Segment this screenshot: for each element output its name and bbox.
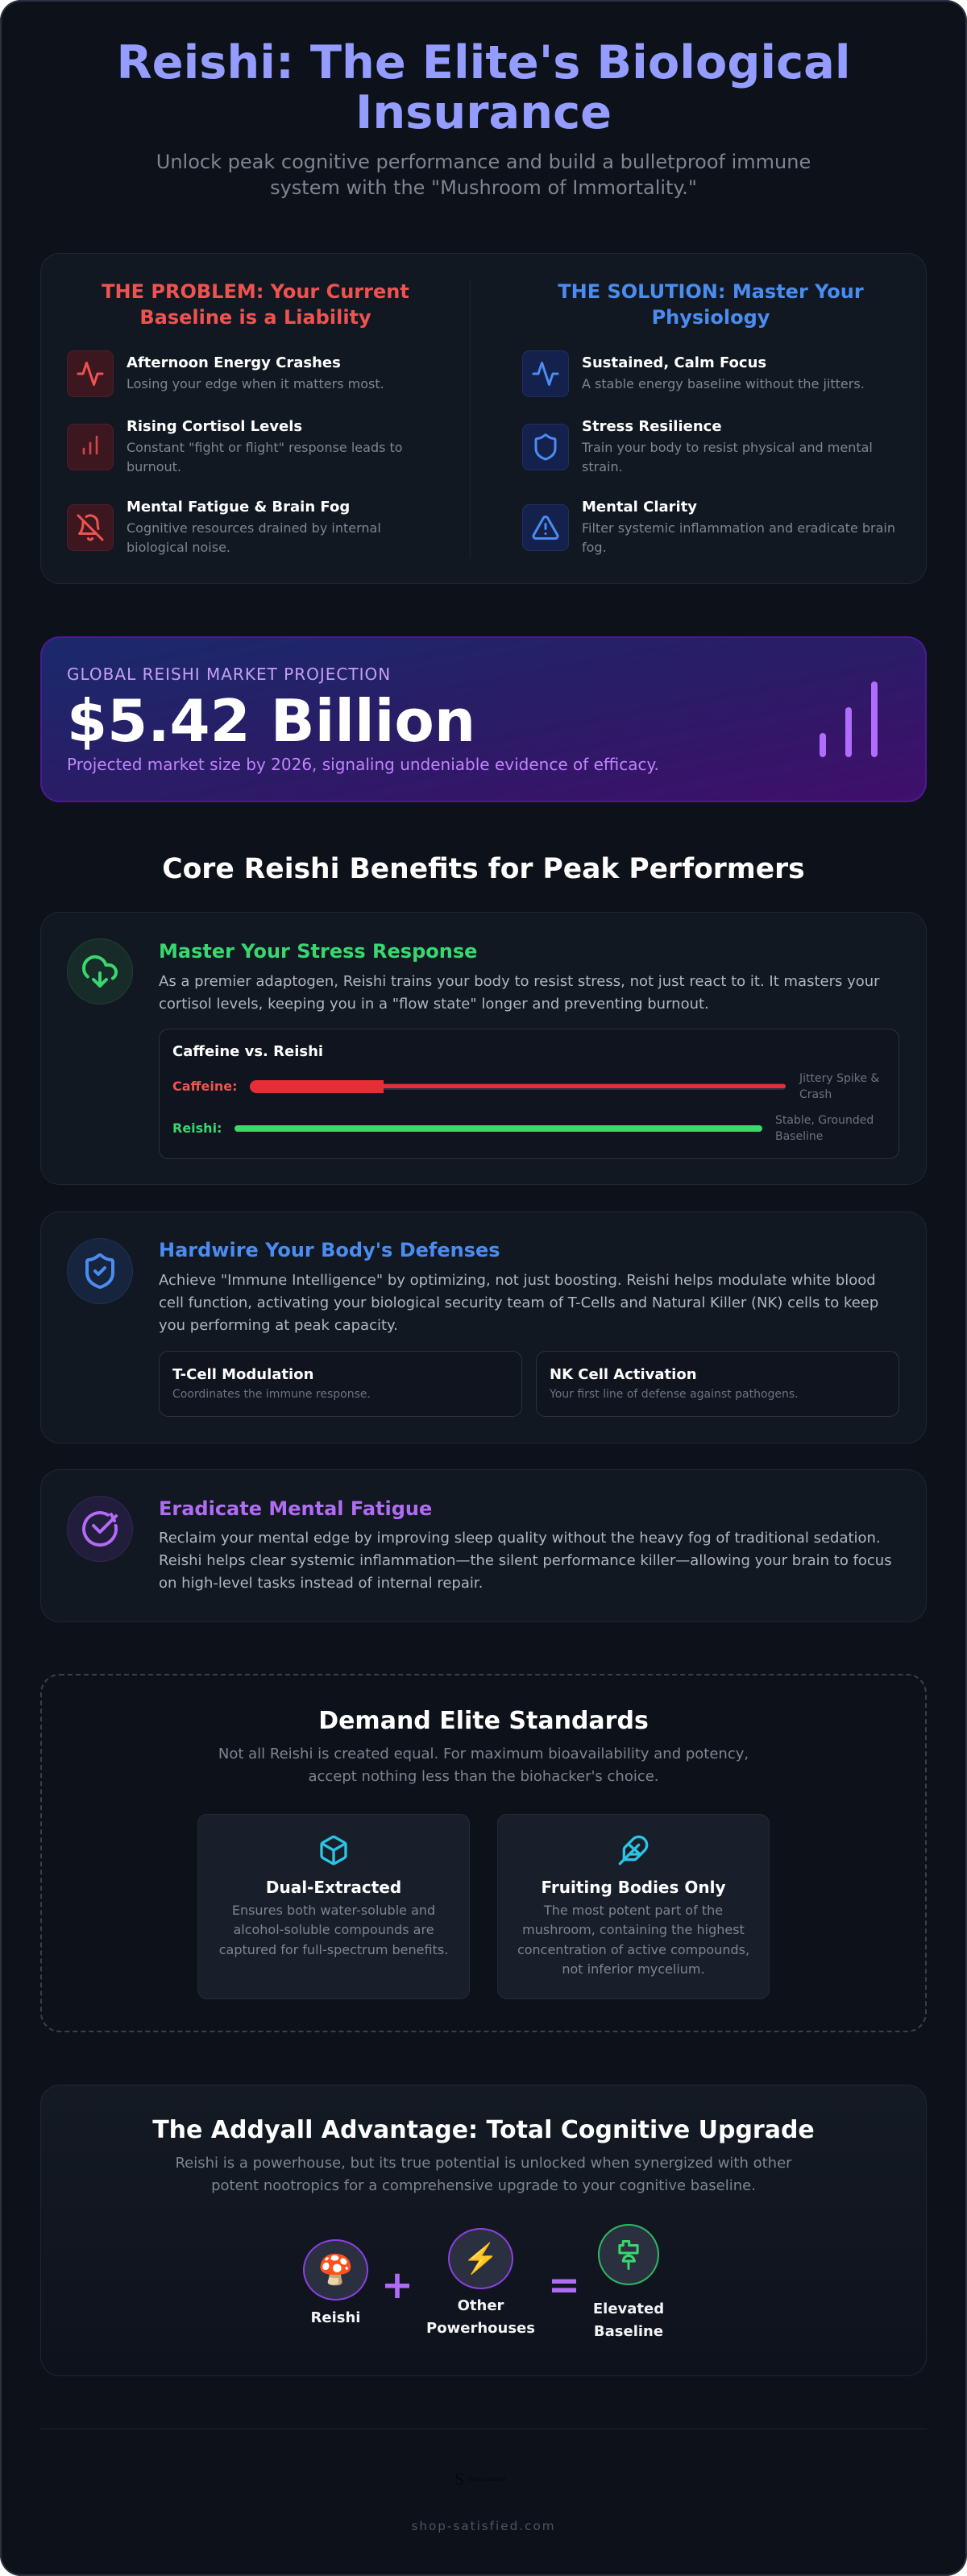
card body bbox=[159, 973, 880, 1013]
section intro bbox=[218, 1746, 749, 1785]
card body: you performing at peak capacity. bbox=[159, 1317, 398, 1334]
text: stress resilience bbox=[582, 418, 873, 474]
caffeine label: Caffeine: bbox=[172, 1079, 237, 1094]
panel: elite standards bbox=[40, 1674, 927, 2032]
icon: activity blue bbox=[522, 350, 569, 397]
icon: shield check bbox=[67, 1238, 133, 1304]
card: dual-extracted bbox=[197, 1814, 470, 1999]
card body: on high-level tasks instead of internal repair. bbox=[159, 1575, 483, 1592]
label: other powerhouses bbox=[426, 2297, 535, 2337]
text: mental fatigue: Cognitive resources drained by internal bbox=[127, 520, 381, 536]
section intro: potent nootropics for a comprehensive upgrade to your cognitive baseline. bbox=[211, 2177, 756, 2194]
label: elevated baseline: Elevated bbox=[593, 2301, 664, 2317]
section heading: Demand Elite Standards bbox=[318, 1707, 649, 1735]
stat value: $5.42 Billion bbox=[67, 687, 475, 755]
card text bbox=[517, 1903, 749, 1977]
card body: Achieve "Immune Intelligence" by optimizing, not just boosting. Reishi helps modulate white blood bbox=[159, 1272, 876, 1289]
heading: the problem bbox=[102, 280, 409, 329]
text: rising cortisol: Rising Cortisol Levels bbox=[127, 418, 302, 435]
problem item: rising cortisol bbox=[67, 418, 403, 474]
card body: Reclaim your mental edge by improving sleep quality without the heavy fog of traditional sedation. bbox=[159, 1530, 881, 1547]
card text: Ensures both water-soluble and bbox=[232, 1903, 435, 1918]
heading: the solution: Physiology bbox=[652, 306, 770, 329]
reishi note bbox=[775, 1114, 874, 1143]
reishi label: Reishi: bbox=[172, 1120, 222, 1136]
stat description: Projected market size by 2026, signaling undeniable evidence of efficacy. bbox=[67, 755, 659, 774]
card heading: Master Your Stress Response bbox=[159, 940, 477, 963]
sub card heading: NK Cell Activation bbox=[550, 1366, 697, 1383]
reishi note: Stable, Grounded bbox=[775, 1114, 874, 1127]
footer logo: Shop Satisfied bbox=[468, 2476, 505, 2483]
solution item: mental clarity bbox=[522, 499, 895, 555]
icon: feather bbox=[619, 1835, 648, 1866]
text: stress resilience: strain. bbox=[582, 459, 623, 474]
heading: the problem: THE PROBLEM: Your Current bbox=[102, 280, 409, 303]
text: afternoon energy crashes: Losing your edge when it matters most. bbox=[127, 376, 384, 391]
subtitle: Unlock peak cognitive performance and build a bulletproof immune bbox=[156, 151, 811, 173]
icon: cloud download bbox=[67, 938, 133, 1004]
card text: concentration of active compounds, bbox=[517, 1942, 749, 1957]
caffeine note: Jittery Spike & bbox=[799, 1072, 879, 1085]
heading: the problem: Baseline is a Liability bbox=[139, 306, 371, 329]
card text: alcohol-soluble compounds are bbox=[233, 1922, 434, 1937]
footer url: shop-satisfied.com bbox=[411, 2519, 556, 2533]
section intro: Reishi is a powerhouse, but its true potential is unlocked when synergized with other bbox=[175, 2155, 792, 2172]
label: elevated baseline: Baseline bbox=[594, 2323, 663, 2340]
card text: The most potent part of the bbox=[544, 1903, 723, 1918]
panel: immune defenses card bbox=[40, 1211, 927, 1443]
caffeine bar bbox=[250, 1080, 786, 1093]
label: other powerhouses: Other bbox=[458, 2297, 504, 2314]
card text: mushroom, containing the highest bbox=[522, 1922, 745, 1937]
text: mental fatigue: Mental Fatigue & Brain Fog bbox=[127, 499, 350, 516]
title: Reishi: The Elite's Biological bbox=[116, 35, 851, 89]
card text bbox=[219, 1903, 448, 1957]
chart title: Caffeine vs. Reishi bbox=[172, 1043, 323, 1060]
subtitle bbox=[156, 151, 811, 199]
card body: cortisol levels, keeping you in a "flow state" longer and preventing burnout. bbox=[159, 996, 709, 1013]
text: mental fatigue: biological noise. bbox=[127, 540, 230, 555]
icon: rising bars red bbox=[67, 424, 114, 470]
card heading: Eradicate Mental Fatigue bbox=[159, 1497, 432, 1520]
icon: shield blue bbox=[522, 424, 569, 470]
label: reishi: Reishi bbox=[311, 2309, 360, 2326]
section intro: accept nothing less than the biohacker's choice. bbox=[308, 1768, 659, 1785]
solution item: stress resilience bbox=[522, 418, 873, 474]
heading: the solution: THE SOLUTION: Master Your bbox=[558, 280, 864, 303]
stat label: GLOBAL REISHI MARKET PROJECTION bbox=[67, 665, 391, 684]
text: mental clarity bbox=[582, 499, 895, 555]
text: mental fatigue bbox=[127, 499, 381, 555]
equation: reishi bbox=[303, 2239, 368, 2326]
footer logo: S bbox=[454, 2469, 464, 2489]
text: rising cortisol: Constant "fight or flight" response leads to bbox=[127, 440, 403, 455]
icon: lightning bbox=[448, 2228, 513, 2289]
text: calm focus bbox=[582, 354, 865, 391]
operator: plus: + bbox=[381, 2263, 413, 2308]
icon: mushroom: 🍄 bbox=[317, 2253, 354, 2287]
text: calm focus: Sustained, Calm Focus bbox=[582, 354, 766, 371]
sub card: t-cell modulation bbox=[159, 1351, 522, 1417]
card heading: Dual-Extracted bbox=[266, 1878, 401, 1897]
solution item: calm focus bbox=[522, 350, 865, 397]
chart: caffeine vs reishi bbox=[159, 1029, 899, 1159]
caffeine note bbox=[799, 1072, 879, 1101]
reishi bar bbox=[234, 1125, 762, 1132]
text: rising cortisol bbox=[127, 418, 403, 474]
text: stress resilience: Stress Resilience bbox=[582, 418, 722, 435]
card body bbox=[159, 1530, 892, 1592]
icon: circle check bbox=[67, 1496, 133, 1562]
card body: cell function, activating your biological security team of T-Cells and Natural Killer (NK) cells to keep bbox=[159, 1294, 878, 1311]
text: rising cortisol: burnout. bbox=[127, 459, 181, 474]
panel: market projection stat bbox=[40, 636, 927, 802]
heading: the solution bbox=[558, 280, 864, 329]
footer logo bbox=[454, 2469, 505, 2489]
subtitle: system with the "Mushroom of Immortality." bbox=[270, 176, 697, 199]
panel: problem and solution bbox=[40, 253, 927, 584]
panel: stress response card bbox=[40, 912, 927, 1185]
card body bbox=[159, 1272, 878, 1334]
section heading: The Addyall Advantage: Total Cognitive Upgrade bbox=[152, 2116, 815, 2144]
problem item: mental fatigue bbox=[67, 499, 381, 555]
card body: As a premier adaptogen, Reishi trains your body to resist stress, not just react to it. It masters your bbox=[159, 973, 880, 990]
label: other powerhouses: Powerhouses bbox=[426, 2320, 535, 2337]
card body: Reishi helps clear systemic inflammation—the silent performance killer—allowing your brain to focus bbox=[159, 1552, 892, 1569]
sub card heading: T-Cell Modulation bbox=[172, 1366, 313, 1383]
reishi note: Baseline bbox=[775, 1130, 823, 1143]
title: Insurance bbox=[355, 85, 612, 139]
text: calm focus: A stable energy baseline without the jitters. bbox=[582, 376, 865, 391]
sub card: nk cell activation bbox=[536, 1351, 899, 1417]
operator: equals: = bbox=[548, 2263, 580, 2308]
problem item: afternoon energy crashes bbox=[67, 350, 384, 397]
icon: box bbox=[320, 1835, 347, 1866]
card heading: Fruiting Bodies Only bbox=[542, 1878, 725, 1897]
text: mental clarity: Mental Clarity bbox=[582, 499, 697, 516]
title bbox=[116, 35, 851, 139]
icon: lightning: ⚡️ bbox=[463, 2242, 499, 2276]
icon: alert triangle blue bbox=[522, 504, 569, 551]
card heading: Hardwire Your Body's Defenses bbox=[159, 1239, 500, 1261]
panel: mental fatigue card bbox=[40, 1469, 927, 1622]
text: afternoon energy crashes: Afternoon Energy Crashes bbox=[127, 354, 341, 371]
icon: growth bars bbox=[820, 681, 878, 757]
icon: bell off red bbox=[67, 504, 114, 551]
sub card text: Your first line of defense against pathogens. bbox=[550, 1388, 799, 1401]
label: elevated baseline bbox=[593, 2301, 664, 2340]
card: fruiting bodies only bbox=[497, 1814, 770, 1999]
text: mental clarity: Filter systemic inflammation and eradicate brain bbox=[582, 520, 895, 536]
card text: not inferior mycelium. bbox=[562, 1961, 705, 1977]
card text: captured for full-spectrum benefits. bbox=[219, 1942, 448, 1957]
text: stress resilience: Train your body to resist physical and mental bbox=[582, 440, 873, 455]
section intro: Not all Reishi is created equal. For maximum bioavailability and potency, bbox=[218, 1746, 749, 1762]
section heading: core benefits: Core Reishi Benefits for Peak Performers bbox=[162, 853, 805, 885]
panel: addyall advantage bbox=[40, 2085, 927, 2376]
sub card text: Coordinates the immune response. bbox=[172, 1388, 371, 1401]
icon: activity red bbox=[67, 350, 114, 397]
equation: elevated baseline bbox=[593, 2224, 664, 2340]
icon: pin bbox=[598, 2224, 659, 2285]
text: mental clarity: fog. bbox=[582, 540, 607, 555]
equation: other powerhouses bbox=[426, 2228, 535, 2337]
icon: mushroom bbox=[303, 2239, 368, 2301]
text: afternoon energy crashes bbox=[127, 354, 384, 391]
section intro bbox=[175, 2155, 792, 2194]
caffeine note: Crash bbox=[799, 1088, 832, 1101]
